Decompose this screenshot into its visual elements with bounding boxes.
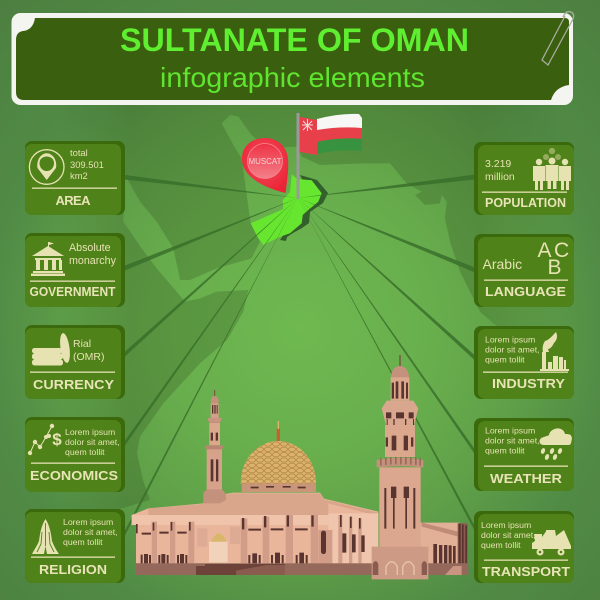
- industry label: INDUSTRY: [492, 376, 565, 391]
- area label: AREA: [56, 193, 91, 208]
- language value: Arabic: [482, 256, 522, 272]
- transport text: quem tollit: [481, 540, 521, 550]
- Oman shadow: [280, 175, 328, 241]
- transport text: Lorem ipsum: [481, 520, 531, 530]
- icon: letters: B: [548, 256, 562, 279]
- title banner: [12, 12, 574, 105]
- area value: total: [70, 147, 88, 158]
- flag green stripe: [317, 138, 362, 154]
- panel: economics: [25, 417, 125, 492]
- panel: religion: [25, 509, 125, 583]
- panel: industry: [474, 326, 574, 399]
- industry text: Lorem ipsum: [485, 334, 535, 344]
- panel: transport: [474, 511, 574, 583]
- icon: government building: [31, 242, 65, 276]
- weather label: WEATHER: [490, 471, 563, 486]
- industry text: quem tollit: [485, 354, 525, 364]
- government value: monarchy: [69, 255, 117, 267]
- left minaret: [203, 390, 226, 503]
- government value: Absolute: [69, 242, 111, 254]
- religion label: RELIGION: [39, 562, 107, 577]
- icon: dump truck: [532, 530, 571, 556]
- dome: [241, 441, 316, 484]
- population value: million: [485, 171, 515, 183]
- flag of Oman: [296, 113, 362, 199]
- paper clip: [542, 12, 574, 65]
- icon: letters: A: [538, 239, 552, 262]
- connector lines: [125, 174, 475, 536]
- icon: praying hands: [32, 519, 59, 554]
- weather text: Lorem ipsum: [485, 426, 535, 436]
- panel: language: [474, 234, 574, 307]
- Oman shape: [251, 174, 322, 245]
- panel: government: [25, 233, 125, 307]
- dome finial: [277, 428, 280, 441]
- flag pole: [296, 113, 300, 199]
- economics text: quem tollit: [65, 447, 105, 457]
- flag white stripe: [317, 114, 362, 130]
- icon: people: [533, 148, 571, 190]
- economics text: dolor sit amet,: [65, 437, 120, 447]
- right wing: [420, 523, 460, 563]
- panel: population: [474, 142, 574, 215]
- main hall: [132, 493, 378, 563]
- icon: rain cloud: [540, 428, 572, 461]
- hall pillars: [152, 515, 362, 563]
- flag red field: [300, 116, 362, 155]
- language label: LANGUAGE: [485, 284, 566, 299]
- base platform: [136, 563, 468, 575]
- panel: currency: [25, 325, 125, 399]
- religion text: dolor sit amet,: [63, 527, 118, 537]
- icon: coins: [32, 333, 72, 366]
- population label: POPULATION: [485, 195, 566, 210]
- currency value: (OMR): [73, 351, 104, 363]
- flag emblem: [302, 119, 313, 131]
- economics text: Lorem ipsum: [65, 427, 115, 437]
- population value: 3.219: [485, 158, 511, 170]
- pin label: MUSCAT: [248, 157, 282, 166]
- map: Oman: [251, 174, 328, 245]
- mosque illustration: [132, 355, 468, 579]
- transport text: dolor sit amet,: [481, 530, 536, 540]
- subtitle: infographic elements: [160, 62, 425, 93]
- panel: area: [25, 141, 125, 215]
- transport label: TRANSPORT: [482, 564, 570, 579]
- religion text: quem tollit: [63, 537, 103, 547]
- icon: factory: [540, 332, 569, 371]
- area value: 309.501: [70, 159, 104, 170]
- weather text: dolor sit amet,: [485, 436, 540, 446]
- area value: km2: [70, 170, 88, 181]
- icon: letters: [538, 239, 569, 279]
- panel: weather: [474, 418, 574, 491]
- icon: location pin: [29, 150, 64, 184]
- hall small windows: [141, 528, 308, 563]
- currency label: CURRENCY: [33, 377, 114, 392]
- map silhouette: [20, 105, 587, 538]
- right minaret: [372, 355, 428, 579]
- religion text: Lorem ipsum: [63, 517, 113, 527]
- central doorway: [209, 542, 228, 562]
- title: SULTANATE OF OMAN: [120, 22, 469, 58]
- icon: growth chart and dollar: $: [52, 430, 62, 449]
- currency value: Rial: [73, 338, 91, 350]
- pin: Muscat: [242, 138, 288, 193]
- industry text: dolor sit amet,: [485, 344, 540, 354]
- economics label: ECONOMICS: [30, 468, 118, 483]
- weather text: quem tollit: [485, 446, 525, 456]
- government label: GOVERNMENT: [30, 284, 116, 299]
- icon: letters: C: [554, 239, 569, 262]
